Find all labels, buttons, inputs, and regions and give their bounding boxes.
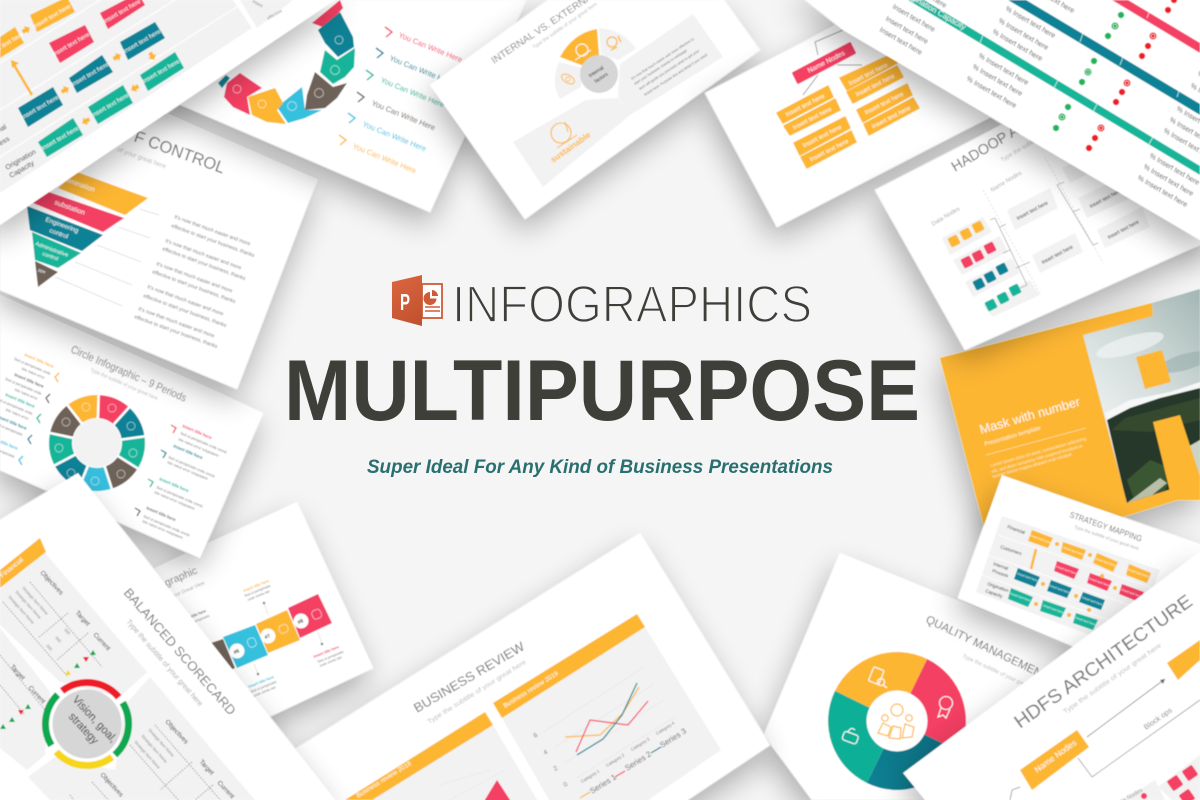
heading: hdfs architecture: HDFS ARCHITECTURE	[1011, 591, 1197, 733]
blocks: strategy map boxes: Insert text here	[40, 125, 81, 152]
blocks: strategy mapping boxes: Insert text here	[1010, 592, 1031, 603]
panel: hadoop slide: Data Nodes	[931, 206, 961, 228]
table: left panel: Target	[9, 664, 26, 682]
panel: puzzle infographic slide: Insert title here	[248, 675, 275, 689]
panel: name nodes slide	[705, 0, 1100, 227]
heading: business review: BUSINESS REVIEW	[411, 638, 528, 716]
panel: review 2019: Category 1	[580, 768, 601, 784]
blocks: strategy mapping boxes: Insert text here	[1082, 596, 1103, 607]
list: right items: Sed ut perspiciatis unde omnis	[143, 514, 191, 538]
panel: strategy map slide	[0, 0, 341, 225]
panel: name nodes slide: Insert text here	[855, 73, 896, 98]
panel: circle infographic slide: Type the subtitle of your great here	[89, 367, 159, 402]
table: financial objectives: Objectives	[39, 570, 65, 597]
text block: pyramid descriptions: It's now that much easier and more	[146, 284, 224, 317]
table: left panel: Current	[27, 685, 47, 705]
list: left items: Insert title here	[14, 372, 45, 389]
table: financial objectives	[3, 570, 112, 677]
panel: strategy map slide: effective	[266, 8, 283, 21]
flow: name nodes connections	[1010, 679, 1200, 800]
text block: factors body: It's now that much easier and more effective to	[630, 37, 695, 81]
list: right items: iste natus error voluptatem	[167, 460, 208, 481]
text block: mask title: Mask with number	[978, 394, 1082, 437]
icon: powerpoint logo: P	[400, 289, 410, 315]
text block: table cells: % Insert text here	[991, 27, 1044, 63]
chart: pyramid: Engineering	[44, 216, 80, 235]
blocks: strategy map boxes: Insert text here	[20, 94, 61, 121]
blocks: strategy mapping boxes: Insert text here	[1089, 577, 1110, 588]
labels: strategy mapping rows: Financial	[1007, 524, 1026, 535]
table: customer panel: Strategic Item Name	[140, 733, 169, 764]
legend: Series 2	[623, 749, 653, 773]
legend: Series 1	[588, 772, 618, 796]
heading: infographics: INFOGRAPHICS	[452, 276, 812, 334]
text block: table cells: Insert text here	[884, 14, 930, 46]
blocks: strategy mapping boxes: Insert text here	[1121, 588, 1142, 599]
panel: mask with number slide	[940, 285, 1200, 530]
table: financial objectives: 000	[45, 643, 54, 652]
text block: pyramid descriptions: effective to start your business, thanks	[151, 269, 237, 305]
text block: table cells: % Insert text here	[997, 16, 1050, 52]
blocks: strategy mapping boxes: Insert text here	[1128, 568, 1149, 579]
text block: factors body: brand here. Purpose line and detail if you need	[643, 53, 708, 97]
list: right items: iste natus error voluptatem	[154, 490, 195, 511]
labels: strategy map rows	[0, 123, 37, 180]
table: financial objectives: Strategic Item Name	[7, 594, 36, 625]
icons: data nodes squares	[947, 220, 1022, 312]
blocks: strategy mapping boxes	[1008, 530, 1151, 630]
panel: puzzle infographic slide: Insert title here	[180, 609, 207, 623]
chart: step blocks	[208, 594, 332, 672]
panel: circle infographic slide	[0, 296, 263, 558]
blocks: strategy mapping boxes: Insert text here	[1043, 604, 1064, 615]
list: you can write here: You Can Write Here	[351, 142, 418, 175]
text block: table cells: % Insert text here	[1136, 173, 1189, 209]
chart: pyramid	[27, 172, 148, 287]
panel: content boxes	[513, 98, 630, 187]
panel: quality management slide	[764, 553, 1200, 800]
panel: balanced scorecard slide: Type the subtitle of your great here	[124, 617, 205, 708]
list: you can write here	[339, 27, 464, 175]
box: name nodes	[1020, 730, 1089, 790]
panel: name nodes slide: Insert text here	[871, 105, 912, 130]
list: right items	[135, 423, 228, 540]
panel: puzzle infographic slide: unde omnis iste	[253, 685, 276, 698]
labels: strategy map rows: Capacity	[8, 160, 36, 180]
list: you can write here: You Can Write Here	[379, 76, 446, 109]
heading: circle infographic: Circle Infographic – 9 Periods	[69, 344, 189, 405]
text block: table cells: % Insert text here	[1148, 151, 1200, 187]
list: left items: iste natus error	[21, 367, 46, 380]
legend	[580, 726, 688, 798]
panel: puzzle infographic slide: Sed ut perspiciatis	[317, 650, 344, 664]
panel: hadoop slide: Insert text here	[1089, 188, 1122, 210]
chart: step blocks: #6	[233, 648, 241, 656]
list: left items: Insert title here	[24, 352, 55, 369]
heading: balanced scorecard: BALANCED SCORECARD	[121, 585, 239, 718]
blocks: strategy mapping boxes: Insert text here	[1063, 546, 1084, 557]
panel: strategy mapping slide: Type the subtitle of your great here	[1074, 524, 1140, 551]
blocks: strategy mapping boxes: Insert text here	[1095, 557, 1116, 568]
tagline: Super Ideal For Any Kind of Business Presentations	[367, 457, 833, 478]
text block: table cells: % Insert text here	[965, 74, 1018, 110]
table: customer panel: Target	[198, 759, 215, 777]
chart: nine period ring	[49, 395, 145, 491]
panel: puzzle infographic slide: Insert title here	[243, 579, 270, 593]
panel: hadoop slide: Insert text here	[1107, 219, 1140, 241]
list: left items: iste natus error	[14, 388, 39, 401]
blocks: strategy map boxes: Insert text here	[51, 31, 92, 58]
blocks: strategy mapping boxes: Insert text here	[1030, 534, 1051, 545]
table: bottom panel: Objectives	[99, 772, 125, 799]
table: customer panel: Objectives	[164, 719, 190, 746]
text block: mask title: Lorem ipsum dolor sit amet, consectetuer adipiscing	[990, 436, 1087, 468]
panel: review 2019: Category 3	[630, 736, 651, 752]
text block: pyramid descriptions: effective to start your business, thanks	[133, 314, 219, 350]
panel: review 2019: Business review 2019	[502, 670, 560, 710]
text block: pyramid descriptions: It's now that much easier and more	[137, 306, 215, 339]
text block: mask title	[978, 394, 1087, 479]
heading: strategy mapping: STRATEGY MAPPING	[1068, 509, 1143, 544]
panel: review 2019: Category 2	[605, 752, 626, 768]
panel: hadoop slide: Type the subtitle	[1000, 136, 1041, 164]
list: right items: Insert title here	[146, 505, 177, 522]
text block: pyramid descriptions	[133, 214, 256, 350]
panel: kpi table slide	[793, 0, 1200, 246]
text block: pyramid descriptions: effective to start your business, thanks	[170, 223, 256, 259]
labels: strategy mapping rows: Internal	[993, 561, 1009, 571]
panel: review 2018	[345, 712, 540, 800]
panel: hdfs architecture slide: Block ops	[1142, 705, 1174, 732]
panel: puzzle infographic slide: Insert title here	[313, 645, 340, 659]
list: right items: Sed ut perspiciatis unde omnis	[156, 485, 204, 509]
panel: puzzle infographic slide: Sed ut perspiciatis	[244, 584, 271, 598]
heading: control: F CONTROL	[132, 128, 227, 177]
chart: pyramid: control	[41, 251, 59, 263]
table: financial objectives: Strategic Item Name	[14, 589, 43, 620]
heading: hadoop: HADOOP ARCHITECTURE	[949, 69, 1111, 175]
list: right items: iste natus error voluptatem	[142, 519, 183, 540]
panel: review 2019: 2	[552, 765, 559, 773]
list: right items: Insert title here	[182, 423, 213, 440]
panel: puzzle infographic slide: unde omnis iste	[319, 655, 342, 668]
text block: table cells: % Insert text here	[1142, 162, 1195, 198]
list: right items: Sed ut perspiciatis unde omnis	[180, 431, 228, 455]
table: financial objectives: Target	[74, 610, 91, 628]
table: left panel	[0, 655, 47, 729]
blocks: strategy mapping boxes: Insert text here	[1017, 572, 1038, 583]
blocks: strategy map boxes: Insert text here	[141, 58, 182, 85]
panel: hadoop slide: Name Nodes	[990, 171, 1023, 194]
list: you can write here: You Can Write Here	[388, 54, 455, 87]
panel: review 2018: Business review 2018	[355, 760, 413, 800]
blocks: strategy map boxes	[0, 0, 184, 157]
button: name nodes: Name Nodes	[807, 50, 847, 75]
text block: table cells	[878, 0, 1200, 209]
heading: quality management: QUALITY MANAGEMENT	[924, 614, 1050, 683]
text block: table cells: % Insert text here	[1004, 4, 1057, 40]
blocks: strategy map boxes: Insert text here	[32, 3, 73, 30]
labels: strategy mapping rows	[985, 524, 1026, 599]
text block: pyramid descriptions: It's now that much easier and more	[173, 214, 251, 247]
shapes: number mask	[1136, 350, 1171, 389]
labels: strategy mapping rows: Process	[992, 568, 1010, 579]
table: financial objectives: Current	[92, 632, 112, 652]
text block: pyramid descriptions: effective to start your business, thanks	[161, 246, 247, 282]
labels: strategy map rows: Origination	[4, 149, 37, 172]
panel: balanced scorecard slide	[0, 473, 340, 800]
table: customer panel: Strategic Item Name	[133, 739, 162, 770]
text block: pyramid descriptions: effective to start your business, thanks	[142, 293, 228, 329]
text block: table cells: Insert text here	[891, 2, 937, 34]
panel: puzzle infographic slide: unde omnis iste	[247, 589, 270, 602]
icon: sustainable: sustainable	[548, 129, 593, 165]
panel: hdfs architecture slide	[903, 548, 1200, 800]
blocks: strategy mapping boxes: Insert text here	[1056, 565, 1077, 576]
chart: step blocks: #8	[297, 618, 305, 626]
panel: name nodes slide: Insert text here	[785, 93, 826, 118]
chart: semi-circle factors: factors	[594, 71, 610, 85]
panel: review 2019: Category 4	[655, 720, 676, 736]
blocks: strategy map boxes: Insert text here	[70, 61, 111, 88]
list: right items: Sed ut perspiciatis unde omnis	[168, 455, 216, 479]
text block: mask title: laoreet dolore magna aliquam erat volutpat.	[992, 451, 1073, 479]
panel: name nodes slide: Insert text here	[864, 91, 905, 116]
panel: internal vs external slide: Type the subtitle of your great here	[532, 1, 599, 51]
text block: table cells: % Insert text here	[971, 62, 1024, 98]
list: left items: iste natus error	[5, 408, 30, 421]
panel: hadoop slide: Insert text here	[1016, 200, 1049, 222]
chart: vision ring: Vision, goal,	[70, 694, 119, 745]
chart: vision ring	[46, 683, 129, 765]
blocks: strategy mapping boxes: Insert text here	[1075, 616, 1096, 627]
icon: document search	[868, 667, 887, 688]
icon: powerpoint logo	[392, 275, 442, 326]
icon: medal	[938, 696, 952, 718]
chart: pyramid: substation	[53, 199, 86, 217]
chart: pyramid: ppe	[38, 267, 47, 275]
arrows: strategy map flow	[11, 24, 158, 127]
chart: pyramid: Administrative	[34, 241, 69, 259]
table: customer panel: Strategic Item Name	[147, 727, 176, 758]
panel: name nodes slide: Insert text here	[848, 62, 889, 87]
list: right items: iste natus error voluptatem	[178, 437, 219, 458]
box: name nodes: Name Nodes	[1032, 737, 1078, 775]
panel: puzzle infographic slide: Type Your Great View	[159, 580, 206, 605]
chart: arrow ring	[218, 0, 355, 124]
list: you can write here: You Can Write Here	[397, 31, 464, 64]
chart: vision ring: strategy	[66, 711, 101, 747]
panel: name nodes slide: Insert text here	[792, 106, 833, 131]
blocks: strategy map boxes: Insert text here	[122, 28, 163, 55]
text block: table cells: % Insert text here	[977, 51, 1030, 87]
chart: pyramid: elimination	[62, 176, 96, 194]
heading: infographic: Infographic	[147, 565, 199, 596]
line chart	[565, 683, 648, 755]
chart: step blocks: #7	[264, 633, 272, 641]
panel: business review slide: Type the subtitle of your great here	[426, 659, 528, 726]
title: multipurpose: MULTIPURPOSE	[284, 343, 920, 439]
list: you can write here: You Can Write Here	[361, 120, 428, 153]
panel: hdfs architecture slide: Type the subtitle of your great here	[1062, 642, 1163, 716]
title block: center	[284, 275, 920, 478]
panel: hierarchy of control slide: of your great here	[116, 146, 167, 171]
table: financial objectives: Strategic Item Name	[21, 585, 50, 616]
list: left items: Insert title here	[5, 392, 36, 409]
text block: mask title: elit, sed diam nonummy nibh euismod tincidunt ut	[991, 443, 1084, 474]
chart: semi-circle factors: Internal	[588, 65, 605, 79]
data nodes mini panel	[1114, 755, 1200, 800]
table: customer panel: Current	[216, 780, 236, 800]
panel: review 2019	[493, 614, 721, 800]
labels: strategy mapping rows: Capacity	[985, 588, 1004, 599]
panel: hierarchy of control slide	[0, 85, 317, 389]
legend: Series 3	[658, 726, 688, 750]
table: bottom panel	[70, 772, 125, 800]
panel: quality management slide: Type the subtitle of your great here	[961, 653, 1041, 695]
list: left items: Sed ut perspiciatis unde	[4, 377, 42, 396]
bands: table rows	[908, 0, 1200, 175]
button: name nodes	[793, 43, 855, 83]
text block: pyramid descriptions: It's now that much easier and more	[164, 238, 242, 271]
list: left items: Sed ut perspiciatis unde	[13, 357, 51, 376]
table: customer panel	[130, 719, 236, 800]
blocks: insert text boxes	[777, 55, 919, 168]
panel: review 2019: 0	[562, 781, 569, 789]
panel: hadoop slide	[875, 69, 1200, 350]
labels: strategy mapping rows: Origination	[987, 581, 1010, 593]
icon: people and gears	[878, 704, 914, 739]
list: right items: Insert title here	[159, 476, 190, 493]
chart: pyramid: control	[48, 227, 70, 241]
text block: mask title: Presentation template	[984, 425, 1042, 448]
chart: quality donut	[828, 652, 966, 790]
panel: internal vs external slide	[430, 0, 760, 219]
list: you can write here: You Can Write Here	[370, 99, 437, 132]
blocks: strategy mapping boxes: Insert text here	[1049, 584, 1070, 595]
panels: scorecard quadrants	[0, 553, 255, 800]
panel: name nodes slide: Insert text here	[802, 124, 843, 149]
chart: semi-circle factors	[555, 28, 636, 99]
list: left items	[0, 352, 59, 465]
text block: factors body: tech will guide you precisely what to get your	[638, 48, 701, 91]
text block: factors body	[630, 37, 708, 97]
icons: status dots	[1053, 0, 1177, 151]
panel: name nodes slide: Insert text here	[809, 138, 850, 163]
icon: bag	[842, 728, 859, 744]
list: right items: Insert title here	[173, 443, 204, 460]
photo: mountain landscape	[1080, 285, 1200, 510]
panel: review 2019: 4	[542, 749, 549, 757]
panel: arrow ring slide	[100, 0, 526, 212]
table: financial objectives: 000	[63, 627, 72, 636]
panel: business review slide	[270, 533, 770, 800]
panel: puzzle infographic slide	[147, 502, 373, 738]
panel: review 2019: 6	[532, 732, 539, 740]
blocks: strategy map boxes: Insert text here	[90, 92, 131, 119]
panel: strategy mapping slide	[958, 475, 1200, 702]
text block: pyramid descriptions: It's now that much easier and more	[155, 261, 233, 294]
panel: puzzle infographic slide: Sed ut perspiciatis	[250, 680, 277, 694]
header: financial	[0, 538, 46, 588]
panel: puzzle infographic slide: Sed ut perspiciatis	[183, 614, 210, 628]
text block: factors body: start your business, thanks to webpage	[633, 49, 688, 86]
table: financial objectives: 000	[54, 635, 63, 644]
arrows: strategy mapping flow	[1031, 542, 1117, 617]
panel: hadoop slide: Insert text here	[1041, 244, 1074, 266]
text block: table cells: Insert text here	[878, 25, 924, 57]
blocks: hadoop name nodes	[942, 150, 1150, 317]
labels: strategy mapping rows: Customers	[1000, 544, 1023, 556]
